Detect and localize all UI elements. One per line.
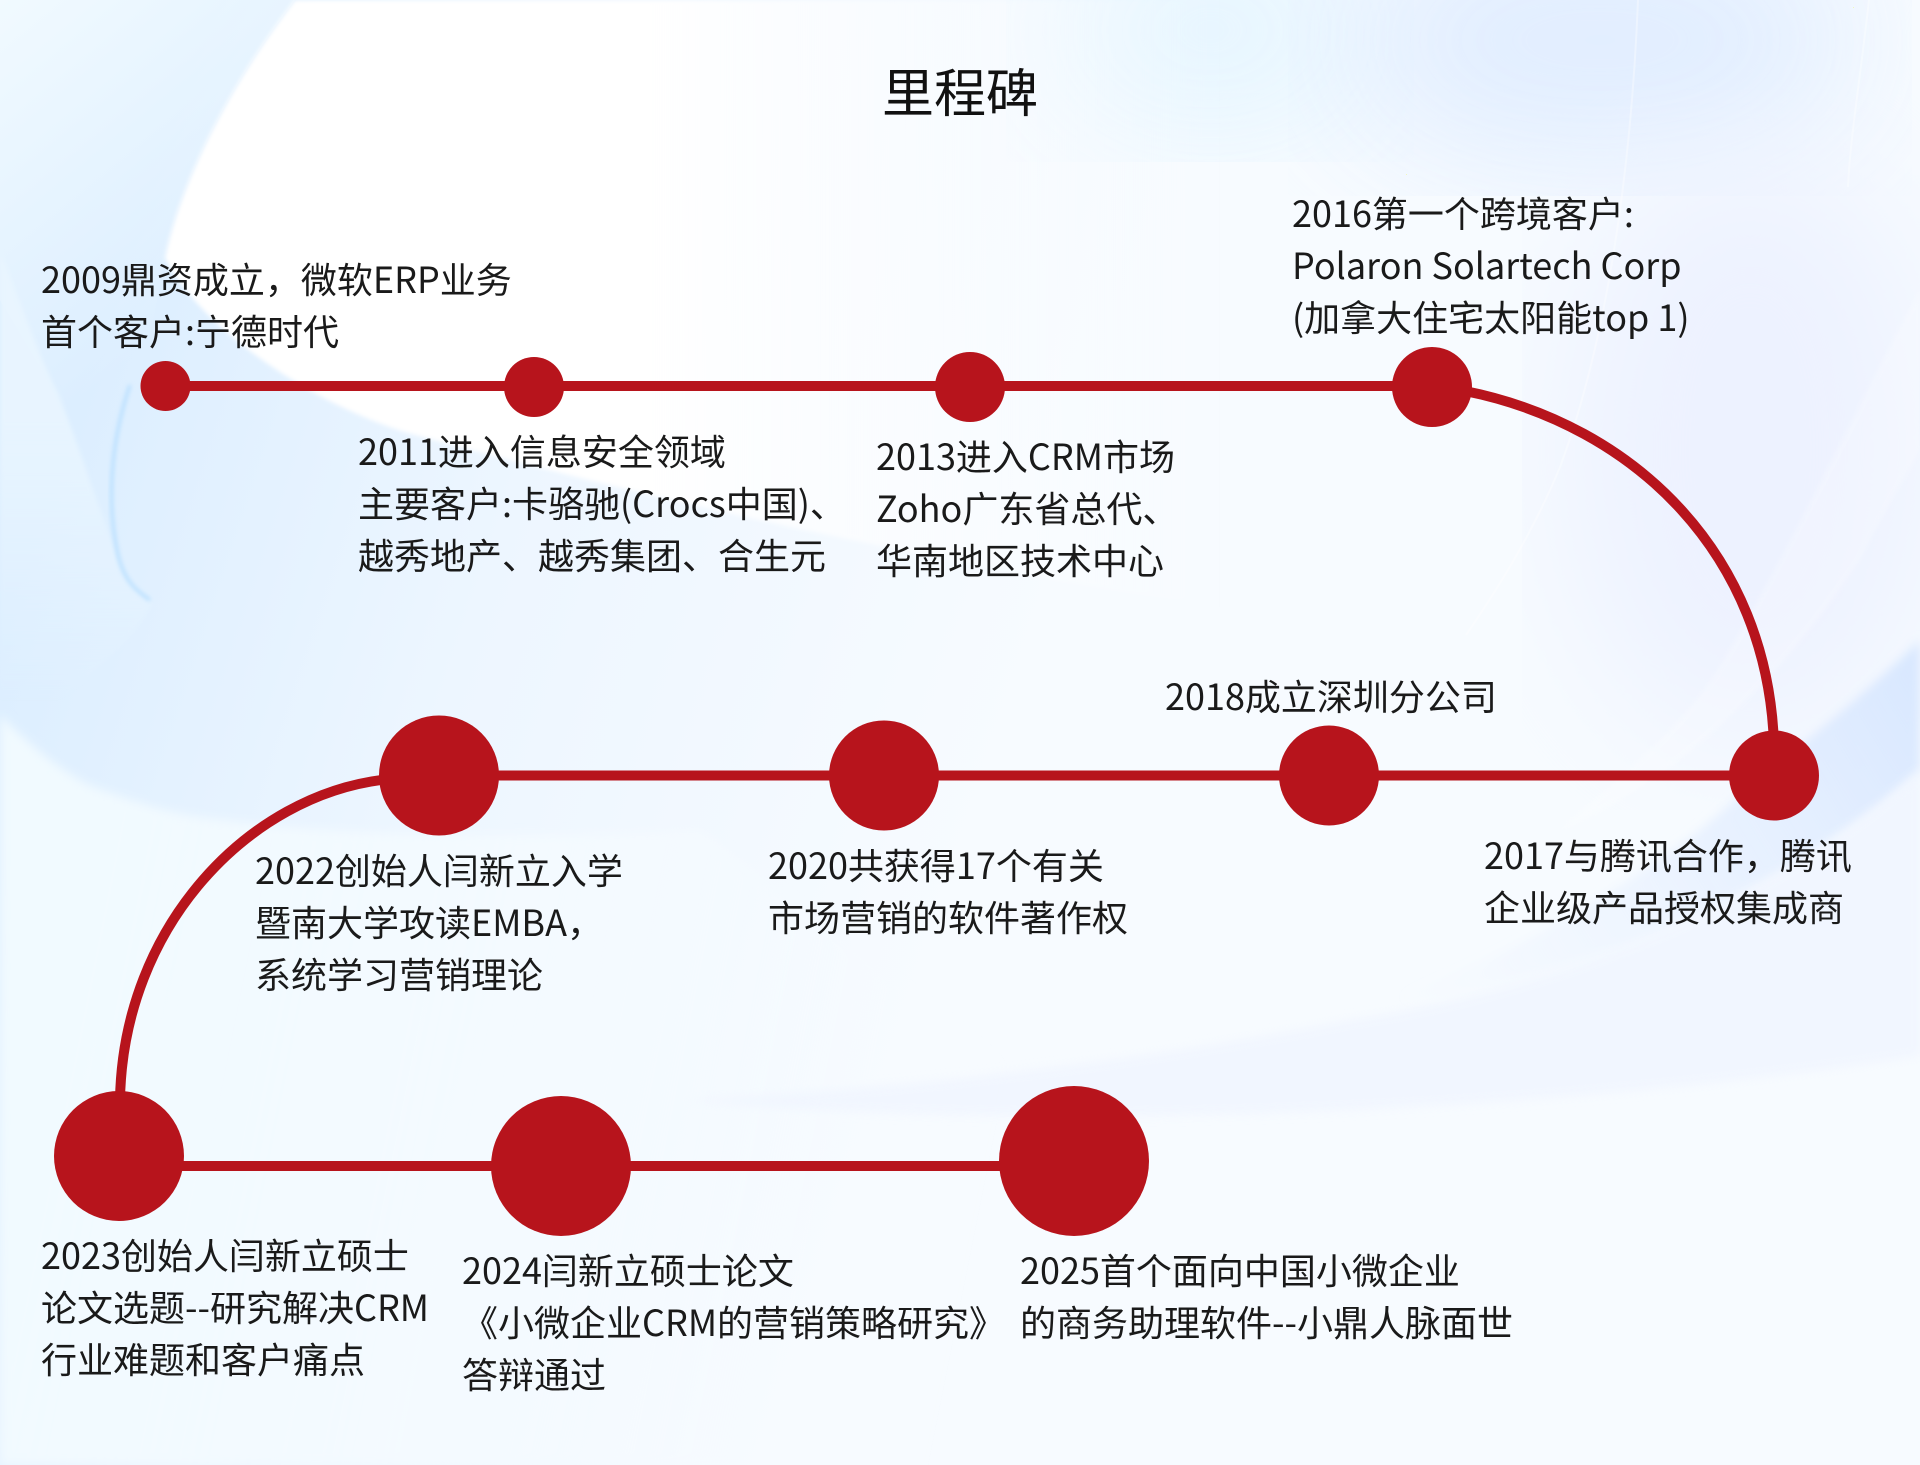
- title: 里程碑: [882, 52, 1038, 127]
- node: 2018: [1279, 726, 1379, 826]
- text: 2011 milestone: [358, 424, 846, 580]
- text: 2017 milestone: [1484, 828, 1852, 932]
- text: 2016 milestone: 2016第一个跨境客户:: [1292, 186, 1634, 238]
- text: 2022 milestone: 2022创始人闫新立入学: [255, 843, 623, 895]
- text: 2025 milestone: [1020, 1243, 1513, 1347]
- connector: first row line: [165, 381, 1432, 391]
- node: 2009: [140, 361, 190, 411]
- text: 2022 milestone: 系统学习营销理论: [255, 947, 543, 999]
- node: 2013: [935, 352, 1005, 422]
- text: 2016 milestone: [1292, 186, 1690, 342]
- text: 2011 milestone: 越秀地产、越秀集团、合生元: [358, 528, 826, 580]
- text: 2023 milestone: [41, 1228, 429, 1384]
- text: 2009 milestone: 首个客户:宁德时代: [41, 304, 339, 356]
- node: 2024: [491, 1096, 631, 1236]
- text: 2022 milestone: [255, 843, 623, 999]
- node: 2022: [379, 716, 499, 836]
- connector: curve to third row: [120, 780, 385, 1100]
- text: 2025 milestone: 的商务助理软件--小鼎人脉面世: [1020, 1295, 1513, 1347]
- text: 2017 milestone: 企业级产品授权集成商: [1484, 880, 1844, 932]
- text: 2024 milestone: 2024闫新立硕士论文: [462, 1243, 794, 1295]
- node: 2025: [999, 1086, 1149, 1236]
- connector: curve to second row: [1465, 391, 1774, 745]
- text: 2013 milestone: 2013进入CRM市场: [876, 429, 1175, 481]
- text: 2016 milestone: (加拿大住宅太阳能top 1): [1292, 290, 1690, 342]
- text: 2024 milestone: 《小微企业CRM的营销策略研究》: [462, 1295, 1005, 1347]
- text: 2023 milestone: 行业难题和客户痛点: [41, 1332, 365, 1384]
- text: 2009 milestone: 2009鼎资成立，微软ERP业务: [41, 252, 512, 304]
- node: 2016: [1392, 347, 1472, 427]
- node: 2017: [1729, 730, 1819, 820]
- connector: third row line: [119, 1161, 1074, 1171]
- text: 2018 milestone: 2018成立深圳分公司: [1165, 669, 1497, 721]
- text: 2020 milestone: [768, 838, 1128, 942]
- node: 2020: [829, 720, 939, 830]
- text: 2024 milestone: [462, 1243, 1005, 1399]
- text: 2009 milestone: [41, 252, 512, 356]
- text: 2023 milestone: 2023创始人闫新立硕士: [41, 1228, 409, 1280]
- text: 2020 milestone: 市场营销的软件著作权: [768, 890, 1128, 942]
- node: 2011: [504, 357, 564, 417]
- connector: second row line: [439, 770, 1774, 780]
- text: 2013 milestone: 华南地区技术中心: [876, 533, 1164, 585]
- text: 2013 milestone: Zoho广东省总代、: [876, 481, 1178, 533]
- text: 2011 milestone: 主要客户:卡骆驰(Crocs中国)、: [358, 476, 846, 528]
- node: 2023: [54, 1091, 184, 1221]
- text: 2017 milestone: 2017与腾讯合作，腾讯: [1484, 828, 1852, 880]
- text: 2016 milestone: Polaron Solartech Corp: [1292, 238, 1682, 290]
- text: 2024 milestone: 答辩通过: [462, 1347, 606, 1399]
- text: 2013 milestone: [876, 429, 1178, 585]
- text: 2023 milestone: 论文选题--研究解决CRM: [41, 1280, 429, 1332]
- text: 2011 milestone: 2011进入信息安全领域: [358, 424, 726, 476]
- text: 2022 milestone: 暨南大学攻读EMBA，: [255, 895, 603, 947]
- text: 2020 milestone: 2020共获得17个有关: [768, 838, 1104, 890]
- text: 2025 milestone: 2025首个面向中国小微企业: [1020, 1243, 1460, 1295]
